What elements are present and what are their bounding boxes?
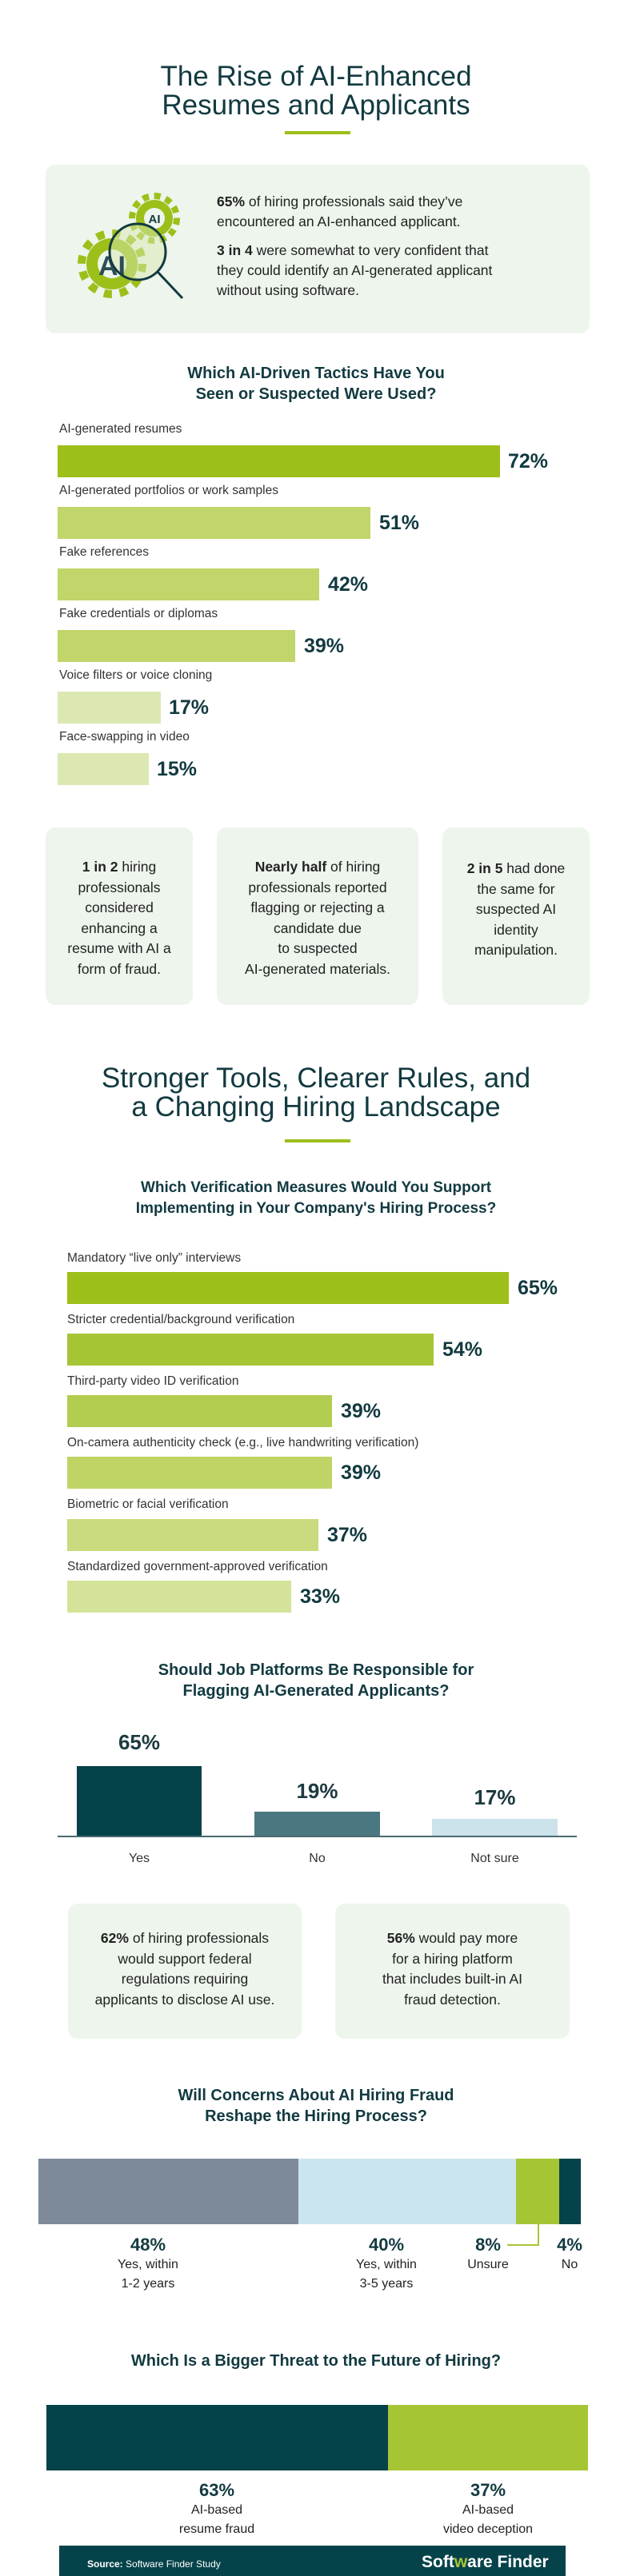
stacked bar: reshape hiring: Yes, within bbox=[356, 2258, 417, 2271]
bar chart: verification: 33% bbox=[300, 1585, 340, 1608]
stacked bar: bigger threat: AI-based bbox=[462, 2503, 514, 2517]
stacked bar: bigger threat: AI-based bbox=[191, 2503, 242, 2517]
icon: gears and magnifier: AI bbox=[149, 213, 160, 226]
callout: 56% bbox=[335, 1904, 570, 2039]
footer bbox=[59, 2546, 566, 2576]
callout: 56%: fraud detection. bbox=[404, 1992, 501, 2008]
stacked bar: bigger threat: 63% bbox=[199, 2480, 234, 2500]
callout: nearly half: to suspected bbox=[278, 940, 358, 956]
bar chart: verification: On-camera authenticity check (e.g., live handwriting verification) bbox=[67, 1436, 418, 1449]
column chart: job platforms: 65% bbox=[118, 1730, 160, 1754]
stacked bar: reshape hiring: 48% bbox=[130, 2235, 166, 2255]
bar chart: verification: Third-party video ID verification bbox=[67, 1374, 238, 1388]
bar chart: tactics: 51% bbox=[379, 512, 419, 534]
heading: reshape hiring: Reshape the Hiring Process? bbox=[205, 2107, 427, 2125]
title: section 2 bbox=[102, 1063, 530, 1123]
bar chart: verification: Biometric or facial verification bbox=[67, 1497, 229, 1511]
heading: tactics: Seen or Suspected Were Used? bbox=[196, 385, 436, 403]
column chart: job platforms: Yes bbox=[129, 1852, 150, 1865]
callout: 2 in 5: suspected AI bbox=[476, 901, 556, 917]
bar chart: tactics bbox=[58, 422, 548, 785]
callout: 1 in 2: professionals bbox=[78, 879, 161, 895]
stacked bar: bigger threat: 37% bbox=[470, 2480, 506, 2500]
title: section 2: a Changing Hiring Landscape bbox=[131, 1091, 501, 1123]
callout: nearly half: AI-generated materials. bbox=[245, 961, 390, 977]
callout: 2 in 5: identity bbox=[494, 921, 538, 937]
text block: intro stats: they could identify an AI-generated applicant bbox=[217, 262, 492, 278]
heading: tactics bbox=[187, 365, 445, 403]
column chart: job platforms: Not sure bbox=[470, 1852, 519, 1865]
heading: reshape hiring: Will Concerns About AI Hiring Fraud bbox=[178, 2087, 454, 2104]
callout: 1 in 2 bbox=[46, 827, 193, 1005]
column chart: job platforms: 17% bbox=[474, 1785, 516, 1809]
callout: 1 in 2: enhancing a bbox=[81, 919, 158, 935]
bar chart: tactics: 15% bbox=[157, 758, 197, 780]
text block: intro stats: 65% of hiring professionals said they’ve bbox=[217, 193, 462, 209]
bar chart: tactics: AI-generated portfolios or work samples bbox=[59, 484, 278, 497]
title bbox=[160, 61, 472, 121]
callout: 62%: regulations requiring bbox=[122, 1971, 248, 1987]
bar chart: verification: Stricter credential/background verification bbox=[67, 1313, 294, 1326]
heading: verification measures: Implementing in Your Company's Hiring Process? bbox=[136, 1200, 496, 1217]
heading: tactics: Which AI-Driven Tactics Have You bbox=[187, 365, 445, 382]
bar chart: verification: Standardized government-approved verification bbox=[67, 1560, 328, 1573]
callout: 1 in 2: considered bbox=[85, 899, 154, 915]
bar chart: tactics: 17% bbox=[169, 696, 209, 719]
callout: 1 in 2: resume with AI a bbox=[67, 940, 171, 956]
bar chart: tactics: Voice filters or voice cloning bbox=[59, 668, 212, 682]
heading: bigger threat: Which Is a Bigger Threat to the Future of Hiring? bbox=[131, 2352, 501, 2370]
callout: 2 in 5: 2 in 5 had done bbox=[467, 860, 565, 876]
bar chart: verification: 39% bbox=[341, 1400, 381, 1422]
stacked bar: reshape hiring: No bbox=[562, 2258, 578, 2271]
callout: nearly half: candidate due bbox=[274, 919, 362, 935]
stacked bar: bigger threat bbox=[46, 2405, 588, 2536]
stacked bar: reshape hiring: Yes, within bbox=[118, 2258, 178, 2271]
source: Source: Software Finder Study bbox=[87, 2558, 221, 2570]
callout: 62%: would support federal bbox=[118, 1951, 252, 1967]
callout: 62%: 62% of hiring professionals bbox=[101, 1930, 269, 1946]
stacked bar: bigger threat: video deception bbox=[443, 2522, 533, 2536]
text block: intro stats: 3 in 4 were somewhat to very confident that bbox=[217, 242, 488, 258]
callout: 1 in 2: form of fraud. bbox=[78, 961, 161, 977]
bar chart: verification: 65% bbox=[518, 1277, 558, 1299]
callout: nearly half bbox=[217, 827, 418, 1005]
stacked bar: reshape hiring: 4% bbox=[557, 2235, 582, 2255]
column chart: job platforms bbox=[58, 1730, 577, 1865]
heading: job platforms: Should Job Platforms Be Responsible for bbox=[158, 1661, 474, 1679]
callout: nearly half: professionals reported bbox=[248, 879, 387, 895]
bar chart: verification: 39% bbox=[341, 1461, 381, 1484]
stacked bar: reshape hiring: 40% bbox=[369, 2235, 404, 2255]
heading: verification measures bbox=[136, 1179, 496, 1217]
column chart: job platforms: No bbox=[309, 1852, 326, 1865]
text block: intro stats: encountered an AI-enhanced applicant. bbox=[217, 213, 461, 229]
callout: 56%: 56% would pay more bbox=[387, 1930, 518, 1946]
icon: gears and magnifier bbox=[78, 193, 183, 299]
column chart: job platforms: 19% bbox=[296, 1779, 338, 1803]
callout: nearly half: flagging or rejecting a bbox=[250, 899, 385, 915]
callout: 2 in 5: manipulation. bbox=[474, 942, 558, 958]
stacked bar: reshape hiring bbox=[38, 2159, 582, 2291]
title: The Rise of AI-Enhanced bbox=[160, 61, 472, 92]
bar chart: tactics: Fake references bbox=[59, 545, 149, 559]
bar chart: verification: Mandatory “live only” interviews bbox=[67, 1251, 241, 1265]
heading: verification measures: Which Verification Measures Would You Support bbox=[141, 1179, 491, 1196]
bar chart: tactics: Fake credentials or diplomas bbox=[59, 607, 218, 620]
title: section 2: Stronger Tools, Clearer Rules, and bbox=[102, 1063, 530, 1094]
callout: 56%: for a hiring platform bbox=[392, 1951, 513, 1967]
stacked bar: reshape hiring: 1-2 years bbox=[122, 2277, 174, 2291]
heading: job platforms bbox=[158, 1661, 474, 1700]
callout: 1 in 2: 1 in 2 hiring bbox=[82, 859, 156, 875]
bar chart: tactics: 72% bbox=[508, 450, 548, 473]
stacked bar: reshape hiring: 8% bbox=[475, 2235, 501, 2255]
title: Resumes and Applicants bbox=[162, 90, 470, 121]
callout: 56%: that includes built-in AI bbox=[382, 1971, 522, 1987]
stacked bar: bigger threat: resume fraud bbox=[179, 2522, 254, 2536]
text block: intro stats bbox=[217, 193, 493, 298]
callout: 2 in 5 bbox=[442, 827, 590, 1005]
panel: intro stats bbox=[46, 165, 590, 333]
bar chart: tactics: 39% bbox=[304, 635, 344, 657]
bar chart: verification: 54% bbox=[442, 1338, 482, 1361]
heading: reshape hiring bbox=[178, 2087, 454, 2125]
text block: intro stats: without using software. bbox=[217, 282, 359, 298]
icon: gears and magnifier: AI bbox=[98, 251, 126, 281]
bar chart: verification bbox=[67, 1251, 558, 1613]
callout: nearly half: Nearly half of hiring bbox=[255, 859, 380, 875]
stacked bar: reshape hiring: 3-5 years bbox=[360, 2277, 413, 2291]
logo: Software Finder bbox=[422, 2553, 549, 2571]
callout: 62% bbox=[68, 1904, 302, 2039]
bar chart: tactics: Face-swapping in video bbox=[59, 730, 190, 744]
callout: 2 in 5: the same for bbox=[477, 881, 555, 897]
stacked bar: reshape hiring: Unsure bbox=[467, 2258, 509, 2271]
heading: job platforms: Flagging AI-Generated Applicants? bbox=[182, 1682, 450, 1700]
bar chart: verification: 37% bbox=[327, 1524, 367, 1546]
callout: 62%: applicants to disclose AI use. bbox=[95, 1992, 274, 2008]
bar chart: tactics: 42% bbox=[328, 573, 368, 596]
connector: 8% bbox=[538, 2224, 539, 2246]
bar chart: tactics: AI-generated resumes bbox=[59, 422, 182, 436]
